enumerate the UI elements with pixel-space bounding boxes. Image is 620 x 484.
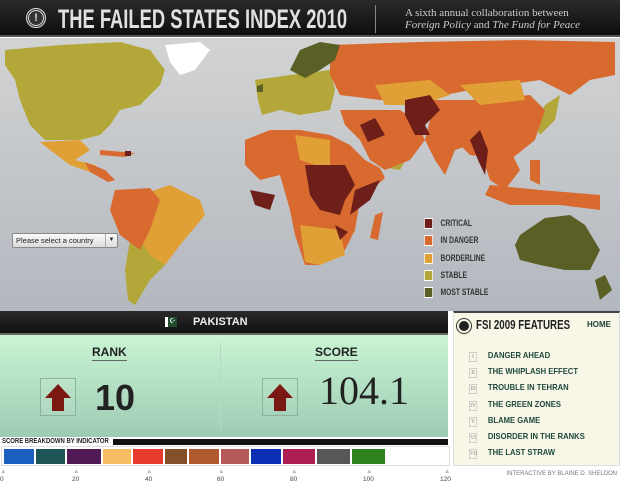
rank: 10 [95, 377, 135, 418]
icon: up arrow [40, 378, 76, 416]
legend: BORDERLINE [440, 253, 485, 263]
icon: logo circle: ! [34, 12, 38, 24]
bar chart: indicators [1, 446, 450, 466]
axis ticks: ▲ [444, 468, 450, 475]
subtitle [375, 5, 580, 33]
legend: MOST STABLE [440, 287, 488, 297]
header bar [0, 0, 620, 37]
list: features: I [472, 354, 474, 360]
list: features: V [471, 419, 475, 425]
score breakdown [0, 438, 451, 483]
icon: up arrow [262, 378, 298, 416]
list: features: THE GREEN ZONES [488, 399, 561, 409]
legend: IN DANGER [440, 235, 478, 245]
score: 104.1 [319, 368, 409, 413]
credit: INTERACTIVE BY BLAINE D. SHELDON [506, 471, 617, 477]
axis ticks: ▲ [218, 468, 224, 475]
list: features: THE LAST STRAW [488, 447, 555, 457]
panel: FSI 2009 features: FSI 2009 FEATURES [476, 318, 570, 332]
country bar [0, 311, 448, 335]
panel: rank and score [0, 335, 448, 437]
score: SCORE [315, 345, 358, 359]
list: features: VII [470, 451, 477, 457]
list: features: TROUBLE IN TEHRAN [488, 382, 569, 392]
score breakdown: SCORE BREAKDOWN BY INDICATOR [2, 438, 109, 445]
icon: flag [165, 317, 177, 327]
country bar: PAKISTAN [193, 316, 248, 328]
axis ticks: ▲ [0, 468, 6, 475]
list: features [469, 350, 585, 459]
list: features: VI [470, 435, 476, 441]
axis ticks: 0 [0, 476, 4, 483]
axis ticks: ▲ [73, 468, 79, 475]
axis ticks: 120 [440, 476, 451, 483]
axis ticks [0, 468, 451, 483]
panel: FSI 2009 features: HOME [587, 320, 611, 329]
axis ticks: ▲ [146, 468, 152, 475]
axis ticks: 60 [217, 476, 224, 483]
axis ticks: ▲ [366, 468, 372, 475]
axis ticks: 80 [290, 476, 297, 483]
subtitle: Foreign Policy and The Fund for Peace [405, 19, 580, 31]
title: THE FAILED STATES INDEX 2010 [58, 4, 347, 34]
axis ticks: ▲ [291, 468, 297, 475]
legend: STABLE [440, 270, 467, 280]
list: features: THE WHIPLASH EFFECT [488, 366, 578, 376]
list: features: DISORDER IN THE RANKS [488, 431, 585, 441]
rank: RANK [92, 345, 127, 359]
world map [0, 38, 620, 311]
legend: CRITICAL [440, 218, 472, 228]
list: features: BLAME GAME [488, 415, 540, 425]
list: features: DANGER AHEAD [488, 350, 550, 360]
subtitle: A sixth annual collaboration between [405, 7, 569, 19]
dropdown: select country: ▼ [109, 237, 114, 243]
panel: FSI 2009 features [453, 311, 620, 466]
icon: target [459, 321, 469, 331]
score [262, 345, 409, 416]
list: features: II [471, 370, 475, 376]
icon: logo circle [26, 8, 46, 28]
dropdown: select country [12, 233, 118, 248]
rank [40, 345, 135, 418]
axis ticks: 40 [145, 476, 152, 483]
list: features: III [470, 386, 476, 392]
list: features: IV [470, 403, 476, 409]
axis ticks: 100 [363, 476, 374, 483]
axis ticks: 20 [72, 476, 79, 483]
legend [424, 218, 488, 298]
icon: flag: ☪ [169, 318, 176, 325]
dropdown: select country: Please select a country [16, 236, 94, 245]
